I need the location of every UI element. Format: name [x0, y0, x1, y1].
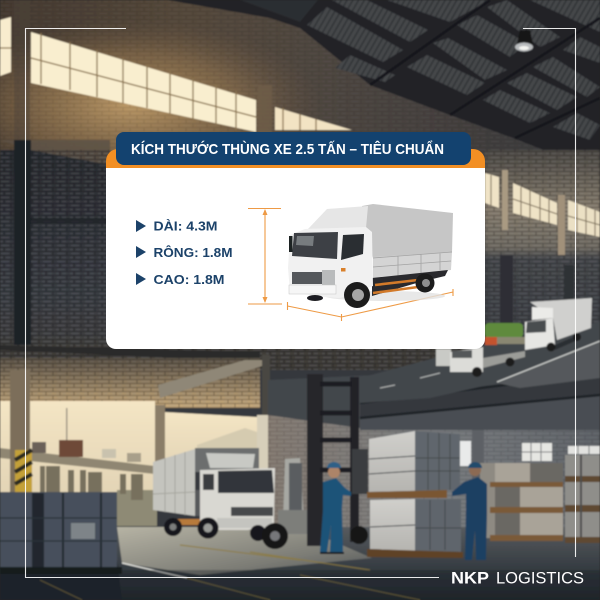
mid wall, right — [485, 150, 600, 345]
steel ceiling — [168, 0, 600, 168]
warehouse ceiling beams — [268, 340, 600, 430]
shrink-wrapped pallet, left — [0, 492, 122, 574]
spec list — [136, 218, 232, 287]
height dimension arrow — [248, 208, 282, 304]
white truck on ramp — [525, 298, 592, 352]
ceiling lamp — [515, 30, 533, 52]
spec: width: RÔNG: 1.8M — [154, 245, 232, 260]
cargo box — [362, 204, 453, 258]
card orange top — [106, 149, 485, 170]
cab body — [288, 227, 373, 298]
worker, left — [320, 462, 351, 554]
spec: height: CAO: 1.8M — [154, 272, 224, 287]
floor dimension lines — [288, 289, 453, 321]
column, upper left — [14, 0, 30, 150]
support columns — [10, 370, 368, 495]
forklift — [262, 374, 368, 549]
grille and lights — [292, 272, 322, 284]
panel: truck dimensions card — [106, 132, 485, 349]
brand logo — [451, 568, 584, 588]
skylight windows left — [0, 17, 352, 135]
dark mid wall, left — [0, 140, 110, 350]
central pallet stacks — [367, 431, 463, 558]
cab deflector — [308, 206, 368, 229]
road and ramp — [360, 322, 600, 403]
strip below card — [0, 345, 600, 370]
heading bar — [116, 132, 471, 165]
sunlit openings with highway — [0, 401, 257, 526]
worker, right — [452, 462, 487, 560]
lower warehouse interior — [268, 412, 600, 530]
back pallet rows — [480, 455, 600, 543]
highway vehicles — [32, 440, 141, 462]
windscreen — [292, 232, 338, 259]
side window — [341, 234, 364, 260]
front wheel — [307, 295, 323, 301]
flatbed truck on road — [436, 347, 525, 377]
bottom vignette shading — [0, 570, 600, 600]
spec: length: DÀI: 4.3M — [154, 218, 218, 234]
brand logo: NKP — [451, 568, 489, 588]
grey delivery truck — [153, 448, 275, 541]
lower lit brick wall — [0, 355, 270, 415]
floor — [0, 527, 600, 600]
heading bar: KÍCH THƯỚC THÙNG XE 2.5 TẤN – TIÊU CHUẨN — [131, 140, 444, 158]
card white body — [106, 168, 485, 349]
truck illustration — [288, 204, 453, 308]
brand logo: LOGISTICS — [496, 568, 584, 588]
upper brick wall with sunlight glow — [0, 0, 600, 190]
chassis — [372, 270, 448, 296]
